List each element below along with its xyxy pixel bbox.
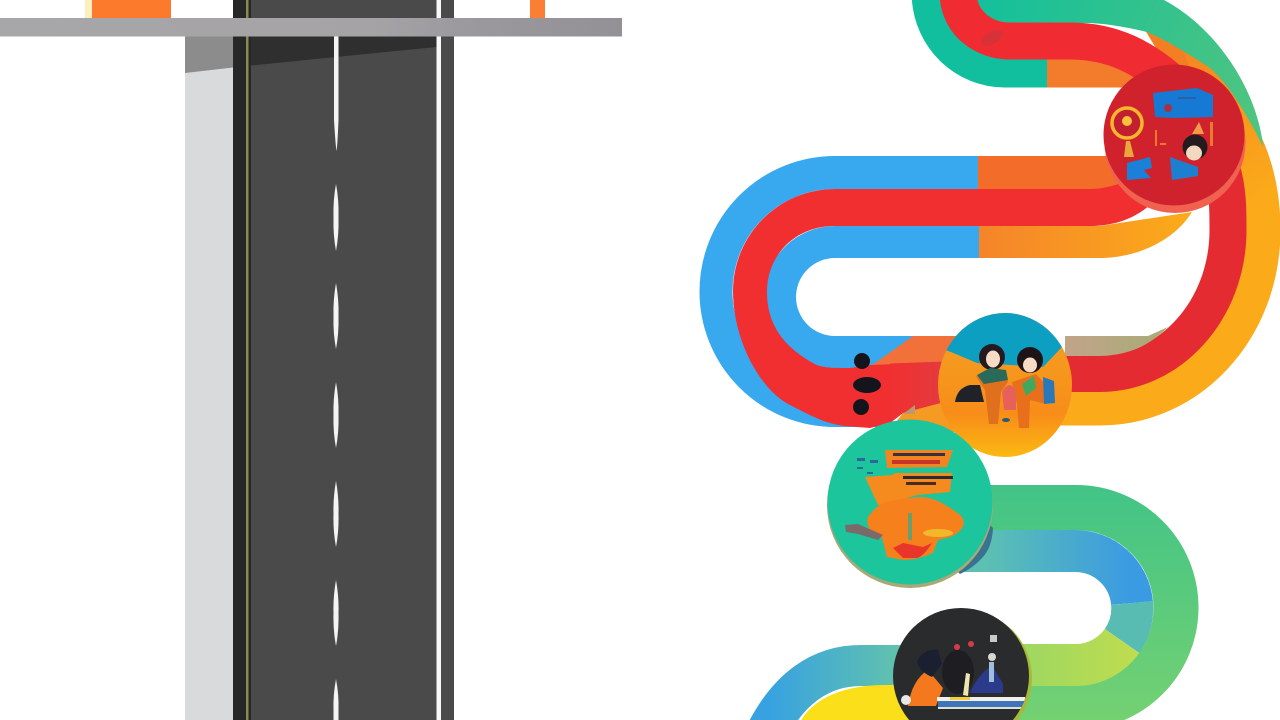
icon: debris [845, 524, 883, 540]
tan segment [1065, 327, 1168, 356]
icon: small white square [990, 635, 997, 642]
disc [893, 608, 1029, 720]
red shading near medallion [890, 362, 945, 423]
disc [938, 313, 1072, 457]
lime inner arc [1020, 641, 1122, 665]
light pavement strip [185, 36, 233, 720]
icon: white speck [901, 695, 911, 705]
orange block right [530, 0, 545, 18]
icon: green stem [908, 513, 912, 540]
asphalt road [233, 0, 454, 720]
icon: right person [1012, 347, 1055, 428]
orange lower band [978, 212, 1192, 258]
orange wedge [868, 336, 960, 368]
icon: figure head [917, 650, 942, 677]
dark shadow crescent [945, 520, 993, 574]
teal green top band [968, 0, 1263, 147]
icon: person [1182, 122, 1208, 160]
orange wedge under green [1145, 30, 1190, 70]
black dots [853, 353, 881, 415]
icon: chat card bottom [865, 473, 953, 505]
road scene [0, 0, 622, 720]
icon: orange blob [867, 497, 964, 560]
teal outer left band [928, 0, 1048, 71]
shelf shadow on road [251, 36, 436, 66]
icon: blue card lower left [1127, 157, 1152, 180]
teal inner arc [1122, 603, 1132, 641]
yellow-green crescent [896, 610, 1032, 720]
small ornament marks [1155, 122, 1213, 146]
green outer band [975, 508, 1176, 708]
circle 1: red medallion [1104, 64, 1246, 213]
red middle band [733, 182, 1150, 428]
blue outer band [716, 172, 979, 410]
icon: white figure [988, 653, 996, 682]
winding ribbon: top section [928, 0, 1263, 408]
rim [1104, 72, 1246, 213]
icon: orange figure [908, 670, 943, 706]
red band smudge [979, 27, 1005, 49]
rim [827, 422, 993, 588]
orange lower wedge [893, 402, 960, 432]
winding ribbon: bottom section [765, 508, 1176, 720]
circle 3: teal medallion [827, 420, 993, 588]
icon: blue card lower right [1170, 157, 1198, 180]
orange segment [1047, 56, 1135, 88]
icon: yellow shape [923, 529, 953, 537]
yellow band [800, 685, 920, 720]
icon: cream stick [963, 673, 970, 696]
overhead grey beam [0, 18, 622, 36]
blue sky area [946, 313, 1062, 367]
blue inner arc [945, 551, 1132, 603]
icon: lantern medal [1112, 108, 1142, 157]
disc [1104, 64, 1244, 206]
centre lane dashes [333, 36, 339, 720]
dark crowd [942, 650, 974, 694]
icon: chat card top [885, 450, 953, 468]
pavement shadow [185, 36, 233, 73]
disc [828, 420, 992, 584]
circle 4: dark medallion [893, 608, 1032, 720]
icon: desk [937, 697, 1025, 709]
orange upper band [978, 156, 1130, 189]
blue-teal lower-left band [765, 665, 905, 720]
icon: blue figures [970, 665, 1003, 693]
scene [901, 635, 1025, 709]
red top band [958, 0, 1185, 95]
orange block left [85, 0, 171, 18]
yellow outer band [1040, 52, 1263, 408]
icon: bag and seat [955, 385, 1016, 422]
red right loop [1050, 170, 1228, 374]
circle 2: couple medallion [938, 300, 1072, 457]
winding ribbon: middle section [716, 172, 1192, 432]
icon: blue cards top [1153, 88, 1213, 118]
icon: small blue marks [857, 458, 878, 474]
icon: left person [976, 344, 1008, 424]
icon: red flame [893, 543, 932, 558]
icon: red accents [954, 641, 974, 650]
blue inner band [780, 242, 979, 352]
tan speck [903, 405, 915, 414]
